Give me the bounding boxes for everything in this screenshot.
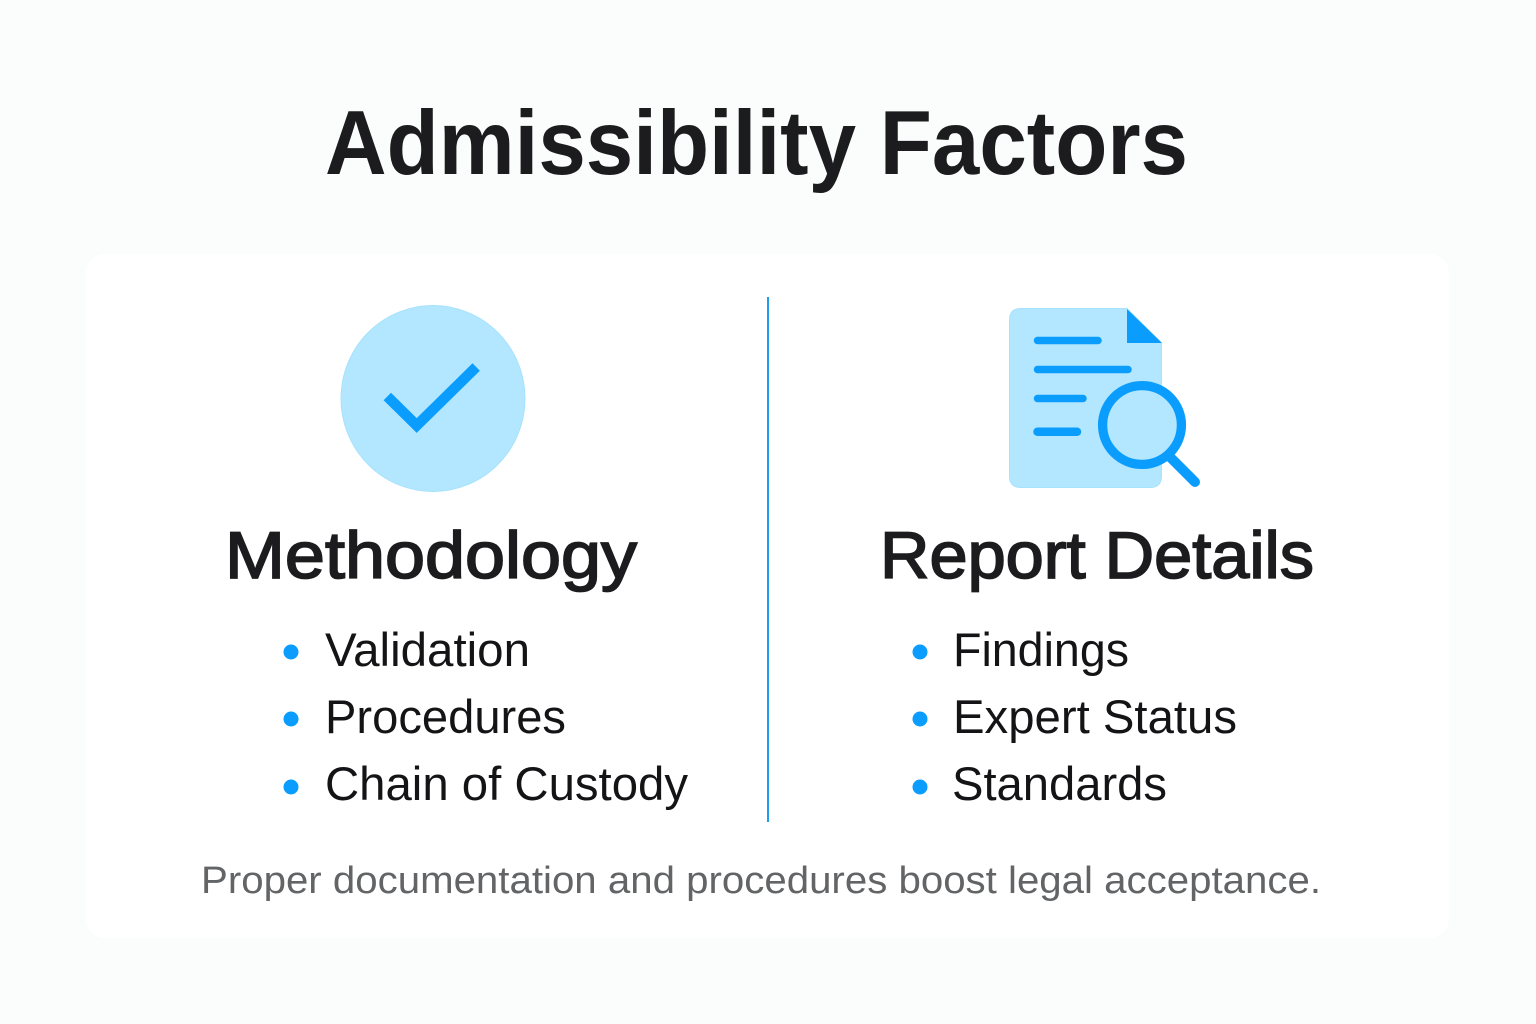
- icon: document with magnifying glass: [1010, 308, 1195, 488]
- list item: Standards: Standards: [952, 757, 1167, 810]
- list: methodology items: [284, 623, 688, 810]
- panel: methodology column: [225, 306, 688, 810]
- heading: Report Details: Report Details: [880, 518, 1314, 592]
- panel: report details column: [880, 308, 1314, 810]
- list item: Procedures: Procedures: [325, 690, 566, 743]
- list item: Chain of Custody: Chain of Custody: [325, 757, 688, 810]
- list item: Findings: Findings: [953, 623, 1129, 676]
- list: report details items: [912, 623, 1237, 810]
- footer note: Proper documentation and procedures boost legal acceptance.: [201, 860, 1321, 902]
- list item: Validation: Validation: [325, 623, 530, 676]
- list item: Expert Status: Expert Status: [953, 690, 1237, 743]
- panel: main card: [86, 254, 1449, 938]
- title: Admissibility Factors: [325, 93, 1188, 194]
- heading: Methodology: Methodology: [225, 518, 637, 592]
- icon: check mark in circle: [341, 306, 525, 492]
- divider between columns: [767, 297, 769, 822]
